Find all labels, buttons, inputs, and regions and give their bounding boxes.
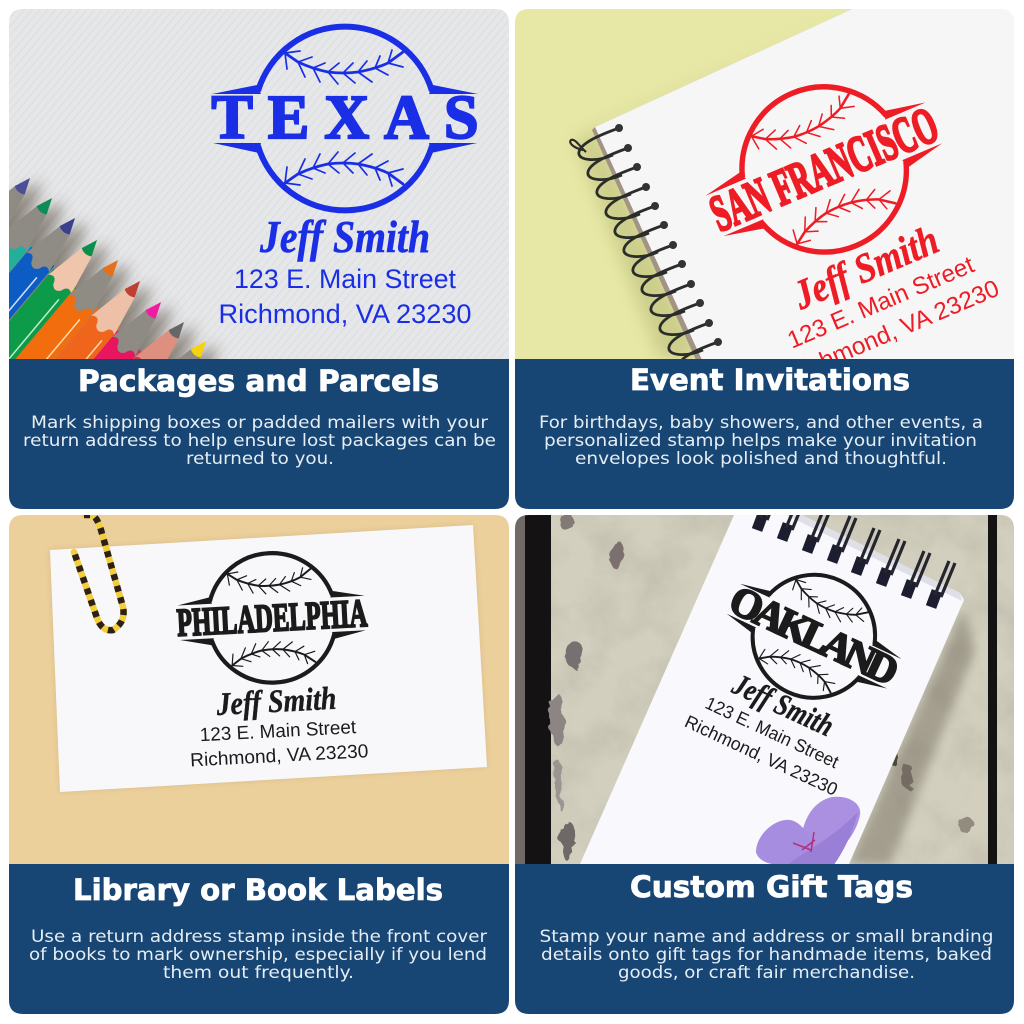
caption: custom gift tags: details onto gift tags for handmade items, baked — [541, 945, 992, 965]
icon: yellow and black paper clip — [74, 515, 124, 630]
caption: library or book labels: them out frequently. — [163, 963, 354, 983]
stamp: Oakland: Jeff Smith — [727, 667, 839, 743]
caption: custom gift tags — [515, 864, 1014, 1014]
caption: custom gift tags: Stamp your name and address or small branding — [540, 927, 994, 947]
stamp: Philadelphia: 123 E. Main Street — [199, 717, 357, 746]
stamp: San Francisco: Jeff Smith — [785, 216, 945, 319]
caption: library or book labels: of books to mark ownership, especially if you lend — [29, 945, 487, 965]
icon: spiral binding — [752, 515, 956, 609]
photo: spiral notepad on peeling painted wood with black Oakland stamp — [515, 484, 1014, 870]
stamp: San Francisco: Richmond, VA 23230 — [783, 275, 1003, 389]
photo: spiral notebook on yellow with red San Francisco stamp — [515, 9, 1014, 391]
caption: event invitations: personalized stamp helps make your invitation — [544, 431, 977, 451]
stamp: Texas: TEXAS — [212, 84, 478, 152]
icon: coloured pencils — [9, 176, 224, 359]
panel: packages and parcels — [9, 9, 509, 509]
stamp: Oakland — [684, 572, 902, 794]
stamp: Oakland: OAKLAND — [723, 576, 906, 695]
panel: custom gift tags — [515, 484, 1014, 1014]
caption: event invitations: Event Invitations — [630, 363, 910, 397]
panel: event invitations — [515, 9, 1014, 509]
caption: library or book labels — [9, 864, 509, 1014]
stamp: Oakland: Richmond, VA 23230 — [682, 711, 841, 800]
icon: purple flower — [756, 797, 860, 870]
stamp: Philadelphia: PHILADELPHIA — [176, 591, 369, 645]
caption: packages and parcels — [9, 359, 509, 509]
peeling paint background — [515, 513, 997, 865]
stamp: Texas — [212, 27, 478, 329]
caption: library or book labels: Use a return address stamp inside the front cover — [31, 927, 487, 947]
photo: white card with paper clip on tan folder and black Philadelphia stamp — [9, 515, 509, 865]
caption: packages and parcels: return address to help ensure lost packages can be — [23, 431, 496, 451]
caption: event invitations — [515, 359, 1014, 509]
caption: packages and parcels: returned to you. — [186, 449, 334, 469]
caption: library or book labels: Library or Book Labels — [73, 873, 443, 907]
icon: spiral binding — [570, 124, 722, 374]
stamp: Philadelphia: Richmond, VA 23230 — [190, 741, 369, 771]
caption: event invitations: For birthdays, baby showers, and other events, a — [539, 413, 983, 433]
caption: custom gift tags: Custom Gift Tags — [630, 870, 913, 904]
caption: packages and parcels: Mark shipping boxes or padded mailers with your — [31, 413, 488, 433]
stamp: San Francisco — [706, 84, 998, 359]
stamp: San Francisco: 123 E. Main Street — [784, 251, 978, 354]
stamp: Philadelphia: Jeff Smith — [215, 681, 337, 723]
stamp: Oakland: 123 E. Main Street — [702, 693, 842, 772]
photo: pencils on textured paper with blue Texas stamp — [9, 9, 509, 359]
caption: custom gift tags: goods, or craft fair merchandise. — [618, 963, 915, 983]
stamp: Texas: 123 E. Main Street — [234, 264, 456, 294]
stamp: Texas: Jeff Smith — [259, 211, 430, 262]
stamp: Texas: Richmond, VA 23230 — [219, 299, 471, 329]
caption: packages and parcels: Packages and Parcels — [78, 364, 439, 398]
caption: event invitations: envelopes look polished and thoughtful. — [575, 449, 947, 469]
stamp: Philadelphia — [174, 548, 375, 772]
panel: library or book labels — [9, 515, 509, 1014]
